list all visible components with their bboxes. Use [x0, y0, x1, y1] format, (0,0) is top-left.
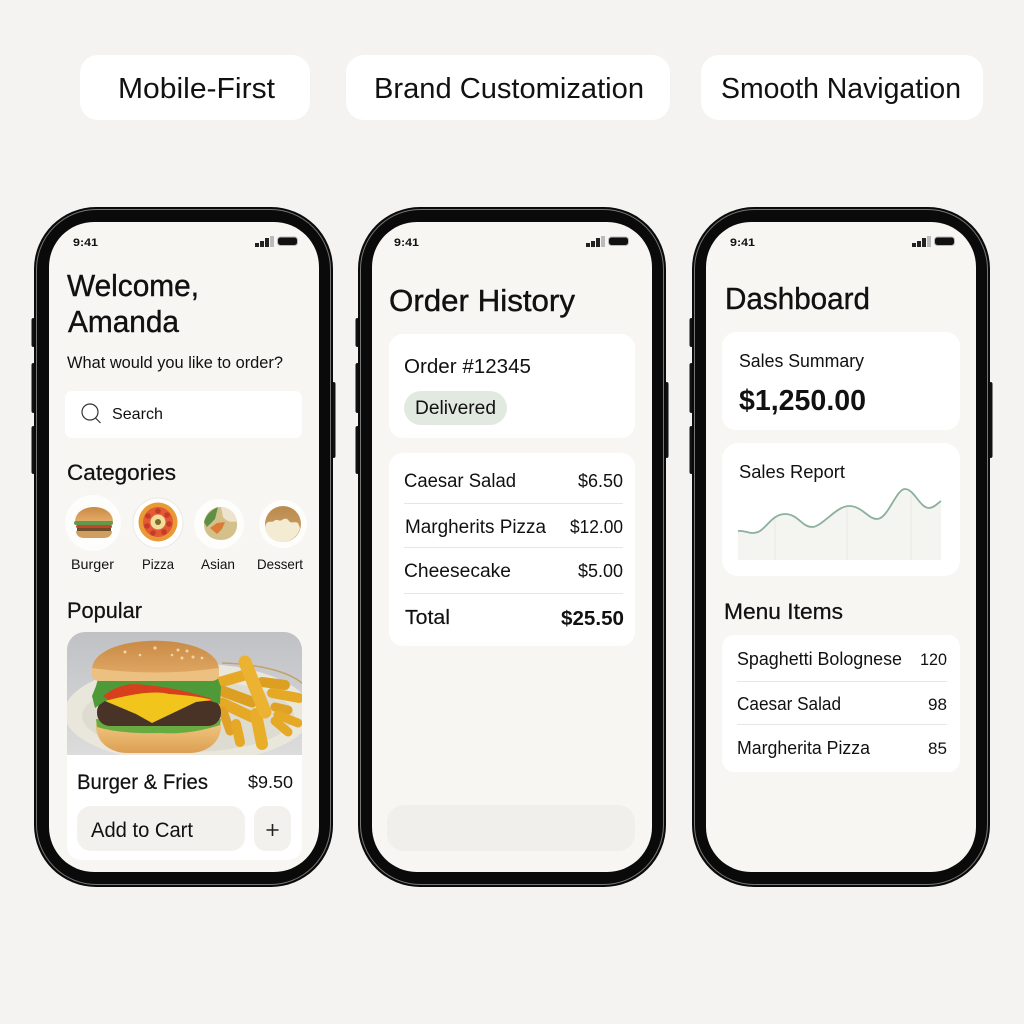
categories heading: Categories — [67, 460, 176, 485]
menu items list: Margherita Pizza — [737, 738, 871, 758]
phone 3: dashboard screen — [690, 207, 992, 887]
sales report card: Sales Report — [739, 461, 845, 482]
sales summary card: $1,250.00 — [739, 385, 866, 417]
menu items list: Caesar Salad — [737, 694, 841, 714]
order items card: Caesar Salad — [404, 471, 516, 492]
sales summary card — [722, 332, 960, 430]
menu items list: 85 — [928, 739, 947, 758]
burger — [96, 724, 221, 753]
icon: search — [82, 404, 100, 423]
delivered badge: Delivered — [415, 397, 496, 419]
category: Asian — [194, 499, 244, 572]
status bar — [394, 236, 628, 249]
popular item card: Burger & Fries — [77, 771, 208, 794]
category: Pizza: Pizza — [142, 556, 174, 572]
order items card: $6.50 — [578, 471, 623, 491]
order items card — [389, 453, 635, 646]
greeting heading: Welcome, — [67, 268, 199, 303]
phone 1: customer ordering screen — [32, 207, 336, 887]
greeting heading — [67, 268, 199, 339]
popular item card — [64, 632, 312, 860]
line chart — [738, 489, 941, 560]
delivered badge — [404, 391, 507, 425]
order items card: Cheesecake — [404, 561, 511, 582]
menu items heading: Menu Items — [724, 599, 843, 624]
sales report card — [722, 443, 960, 576]
phone 3 frame — [690, 207, 992, 887]
feature pill: Brand Customization — [346, 55, 670, 120]
menu items list: Spaghetti Bolognese — [737, 649, 902, 669]
order history heading: Order History — [389, 283, 575, 318]
menu items list — [722, 635, 960, 772]
empty bottom button — [387, 805, 635, 851]
popular heading: Popular — [67, 598, 142, 623]
status bar: 9:41 — [394, 237, 419, 249]
dashboard heading: Dashboard — [725, 281, 870, 316]
phone 2 frame — [356, 207, 668, 887]
status bar: 9:41 — [73, 237, 98, 249]
add to cart button — [77, 806, 245, 851]
greeting heading: Amanda — [68, 304, 180, 339]
order items card: $5.00 — [578, 561, 623, 581]
category: Asian: Asian — [201, 556, 235, 572]
hero image: burger and fries — [67, 632, 302, 755]
category: Dessert: Dessert — [257, 556, 303, 572]
feature pill: Smooth Navigation — [701, 55, 983, 120]
order status card: Order #12345 — [404, 356, 531, 378]
sesame seeds — [124, 646, 203, 660]
subheading: What would you like to order? — [67, 353, 283, 372]
category: Dessert — [257, 500, 307, 572]
feature pill: Smooth Navigation: Smooth Navigation — [721, 73, 961, 105]
add to cart button: Add to Cart — [91, 819, 193, 842]
order items card: $12.00 — [570, 517, 623, 537]
order items card: $25.50 — [561, 607, 624, 630]
feature pill: Mobile-First: Mobile-First — [118, 73, 275, 105]
feature pill: Mobile-First — [80, 55, 310, 120]
order items card: Total — [405, 607, 450, 629]
status bar — [730, 236, 954, 249]
search bar: Search — [112, 406, 163, 423]
menu items list: 120 — [920, 650, 947, 669]
order items card: Margherits Pizza — [405, 517, 546, 538]
category: Burger: Burger — [71, 556, 114, 572]
menu items list: 98 — [928, 695, 947, 714]
feature pill: Brand Customization: Brand Customization — [374, 73, 644, 105]
status bar: 9:41 — [730, 237, 755, 249]
fries — [214, 662, 299, 744]
search bar — [65, 391, 302, 438]
sales summary card: Sales Summary — [739, 351, 864, 371]
phone 1 frame — [32, 207, 336, 887]
plus button — [254, 806, 291, 851]
category: Pizza — [133, 498, 183, 572]
popular item card: $9.50 — [248, 772, 293, 792]
status bar — [73, 236, 298, 249]
category: Burger — [65, 495, 121, 572]
phone 2: order history screen — [356, 207, 668, 887]
order status card — [389, 334, 635, 438]
